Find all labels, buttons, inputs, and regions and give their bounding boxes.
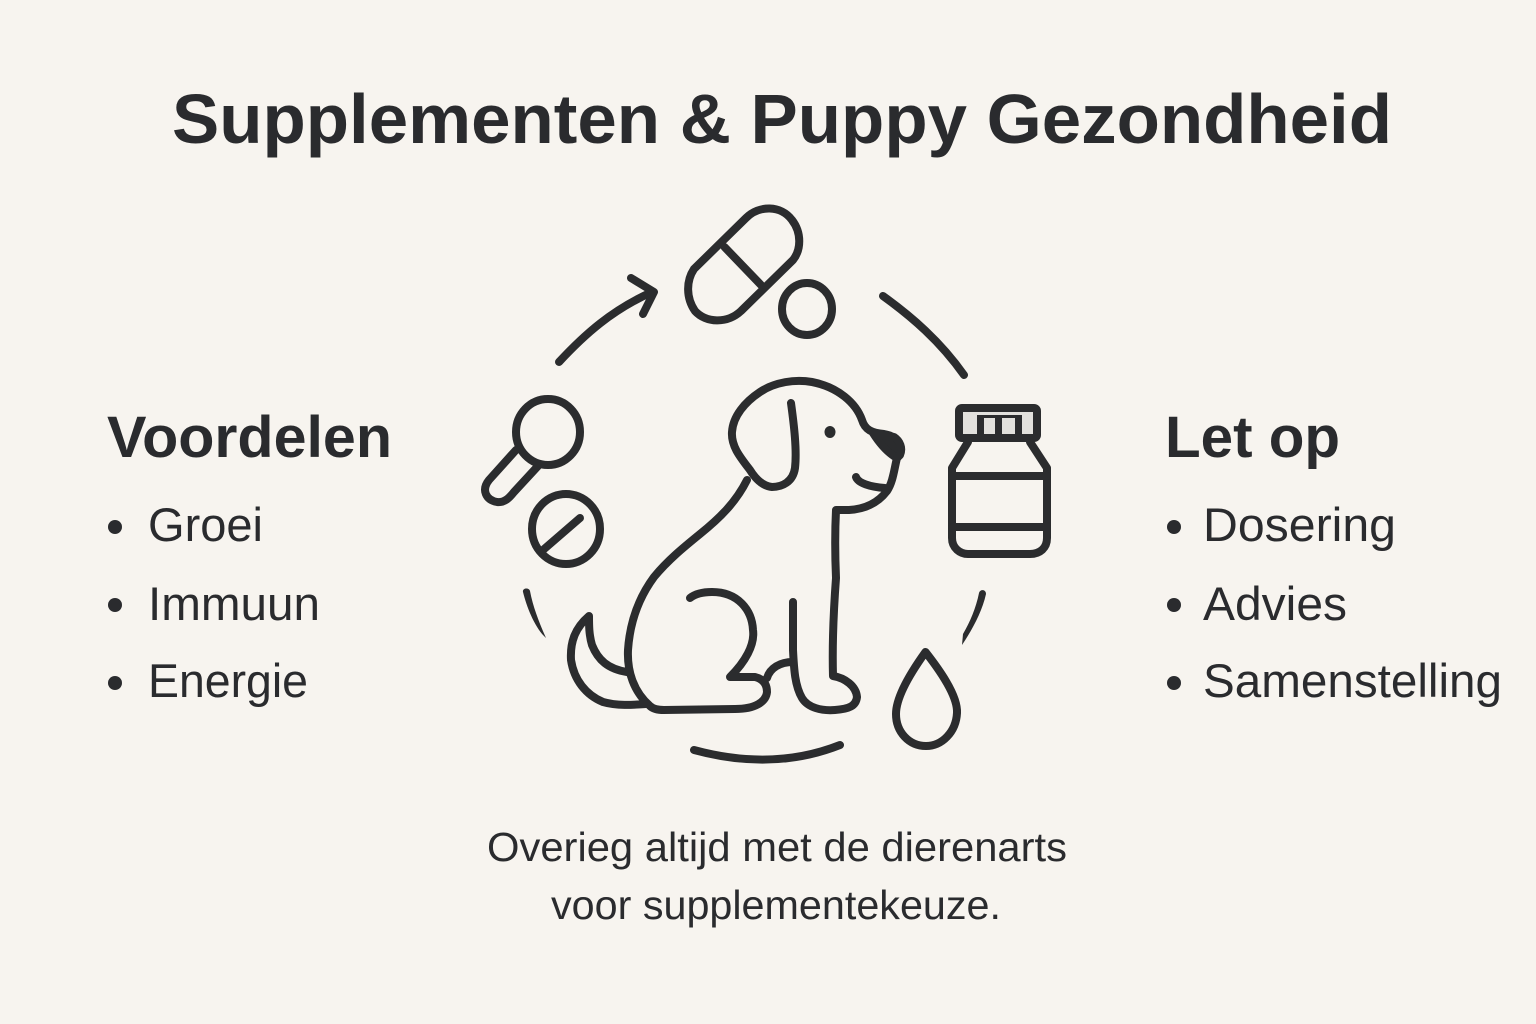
list item: samenstelling: Samenstelling	[1203, 654, 1502, 707]
heading: let op: Let op	[1165, 405, 1340, 470]
icon: round tablet	[782, 283, 832, 335]
arc: right tapered	[962, 590, 986, 645]
icon: capsule	[688, 208, 799, 320]
icon: bottle	[952, 408, 1047, 554]
central diagram	[485, 208, 1047, 760]
list item: energie: Energie	[148, 654, 308, 707]
icon: magnifier	[485, 399, 580, 502]
arc: left tapered	[523, 588, 546, 638]
panel: let op	[1165, 405, 1502, 707]
icon: scored tablet	[532, 494, 600, 564]
footer note: Overieg altijd met de dierenarts	[487, 824, 1067, 870]
list item: dosering: Dosering	[1203, 498, 1396, 551]
list item: groei: Groei	[148, 498, 263, 551]
footer note: voor supplementekeuze.	[551, 882, 1001, 928]
list item: advies: Advies	[1203, 577, 1347, 630]
arc: bottom	[694, 745, 840, 760]
list item: immuun: Immuun	[148, 577, 320, 630]
icon: puppy	[571, 381, 901, 710]
title: Supplementen & Puppy Gezondheid	[172, 80, 1392, 158]
panel: voordelen	[107, 405, 392, 707]
heading: voordelen: Voordelen	[107, 405, 392, 470]
icon: water drop	[896, 652, 957, 746]
arc: top right	[883, 296, 964, 375]
arrow: cycle arc with head	[559, 278, 654, 362]
icon: dot eye	[824, 426, 836, 438]
footer note	[487, 824, 1067, 928]
